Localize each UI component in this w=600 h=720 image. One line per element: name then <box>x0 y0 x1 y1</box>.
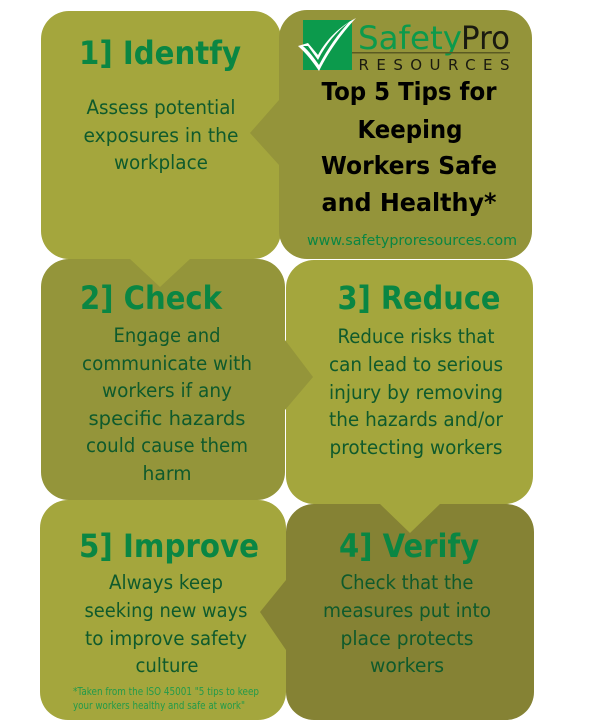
text: tip 3 body: injury by removing <box>329 381 503 404</box>
text: tip 2 body: specific hazards <box>88 407 246 430</box>
text: tip 5 body <box>84 571 248 677</box>
text: tip 1 body: Assess potential <box>86 96 236 119</box>
text: tip 1 body: workplace <box>114 151 208 174</box>
text: tip 1 body: exposures in the <box>84 124 238 147</box>
text: tip 3 body: Reduce risks that <box>338 325 495 348</box>
text: tip 4 body: Check that the <box>340 571 474 594</box>
text: tip 4 body: workers <box>370 654 444 677</box>
text: tip 5 body: Always keep <box>109 571 223 594</box>
text: tip 2 body: communicate with <box>82 352 252 375</box>
panel: tip 1 identify <box>41 11 281 287</box>
footnote <box>73 685 259 712</box>
heading: 2 Check: 2] Check <box>80 279 223 317</box>
footnote: your workers healthy and safe at work" <box>73 699 245 712</box>
icon: green square with check mark <box>298 18 356 71</box>
text: tip 4 body: place protects <box>340 627 474 650</box>
text: tip 2 body: workers if any <box>102 379 232 402</box>
text: tip 3 body <box>329 325 504 459</box>
panel: tip 5 improve <box>40 500 286 720</box>
text: tip 5 body: to improve safety <box>85 627 247 650</box>
heading: 3 Reduce: 3] Reduce <box>338 279 500 317</box>
panel: tip 4 verify <box>260 504 534 720</box>
text: tip 2 body: harm <box>142 462 192 485</box>
text: tip 5 body: seeking new ways <box>84 599 248 622</box>
logo subtitle: RESOURCES <box>358 56 510 74</box>
text: tip 4 body <box>323 571 491 677</box>
heading: main title: Workers Safe <box>321 151 497 180</box>
text: tip 3 body: the hazards and/or <box>329 408 504 431</box>
panel: tip 2 check <box>41 259 313 500</box>
text: tip 2 body: Engage and <box>114 324 220 347</box>
heading: 4 Verify: 4] Verify <box>339 527 479 565</box>
heading: main title: Top 5 Tips for <box>322 77 497 106</box>
text: tip 4 body: measures put into <box>323 599 491 622</box>
text: tip 5 body: culture <box>136 654 198 677</box>
text: tip 2 body: could cause them <box>86 434 248 457</box>
heading: main title: and Healthy* <box>322 188 496 217</box>
logo: SafetyPro Resources <box>298 18 510 74</box>
heading: main title: Keeping <box>358 115 462 144</box>
logo: SafetyPro Resources: Pro <box>461 19 510 57</box>
website url: www.safetyproresources.com <box>307 233 517 249</box>
text: tip 3 body: can lead to serious <box>329 353 503 376</box>
text: tip 3 body: protecting workers <box>330 436 502 459</box>
heading: main title <box>321 77 497 217</box>
panel: title <box>250 10 532 259</box>
text: tip 2 body <box>82 324 252 485</box>
logo wordmark: Safety <box>358 19 462 57</box>
footnote: *Taken from the ISO 45001 "5 tips to keep <box>73 685 259 698</box>
text: tip 1 body <box>84 96 238 174</box>
panel: tip 3 reduce <box>286 260 533 533</box>
heading: 1 Identfy: 1] Identfy <box>79 34 241 72</box>
heading: 5 Improve: 5] Improve <box>79 527 259 565</box>
